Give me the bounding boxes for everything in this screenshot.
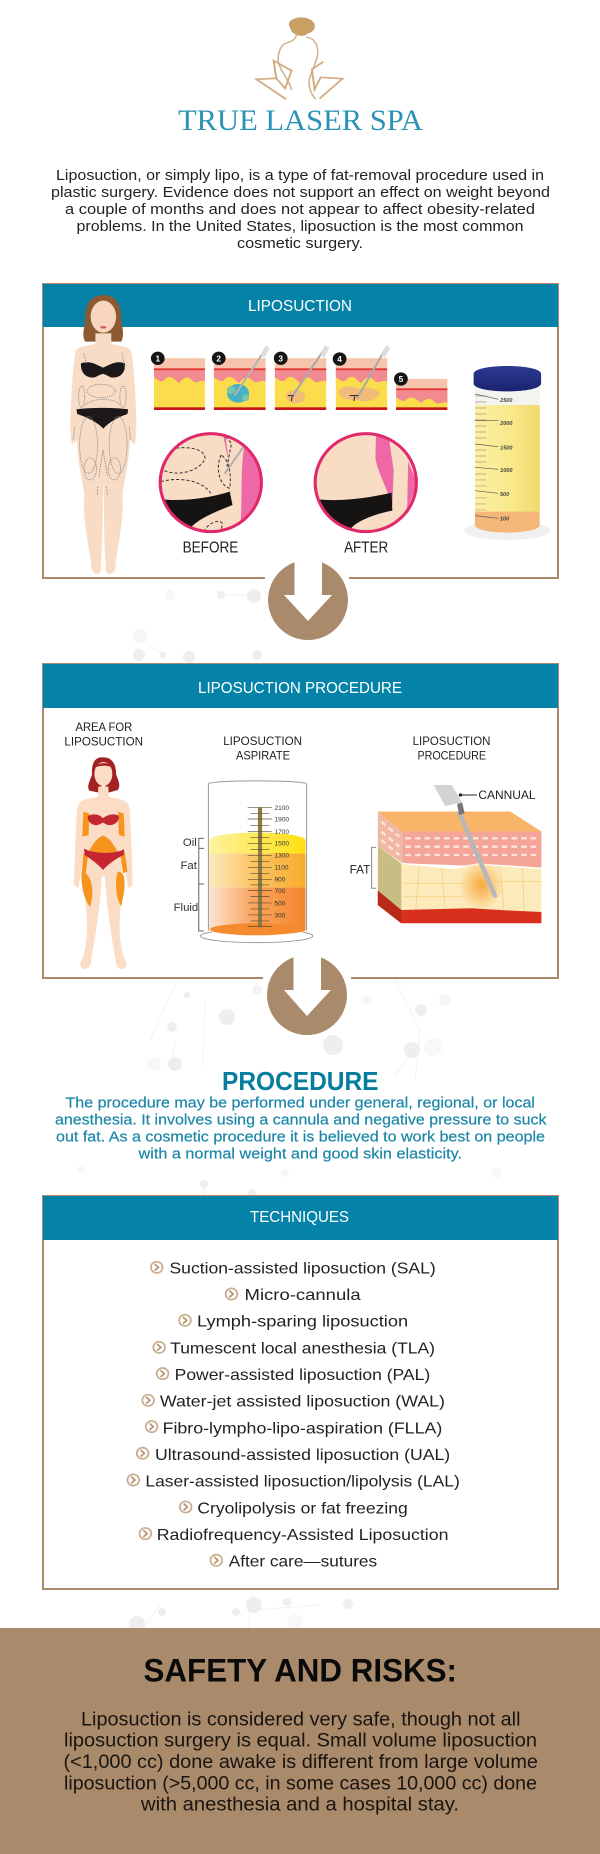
techniques list xyxy=(127,1261,460,1571)
aspirate beaker: 500 xyxy=(275,900,286,907)
intro text: cosmetic surgery. xyxy=(237,235,363,252)
procedure text: The procedure may be performed under general, regional, or local xyxy=(66,1095,535,1112)
intro text: plastic surgery. Evidence does not support an effect on weight beyond xyxy=(51,184,550,201)
logo xyxy=(178,17,423,137)
intro text xyxy=(51,167,550,252)
aspirate beaker: 1700 xyxy=(275,829,289,836)
header title: LIPOSUCTION PROCEDURE xyxy=(198,680,402,697)
icon: woman with dashed areas xyxy=(70,295,136,574)
aspirate beaker: 2100 xyxy=(275,805,289,812)
number badge: 2 xyxy=(216,354,222,363)
heading: procedure: PROCEDURE xyxy=(222,1066,378,1096)
step 3: skin block with cannula xyxy=(274,345,329,410)
collection cylinder: 1000 xyxy=(500,468,512,474)
panel illustrations xyxy=(70,295,550,574)
caption: liposuction aspirate: ASPIRATE xyxy=(236,749,290,763)
panel: safety and risks xyxy=(0,1628,600,1854)
aspirate beaker: 1100 xyxy=(275,865,289,872)
intro text: a couple of months and does not appear to affect obesity-related xyxy=(65,201,535,218)
label: after: AFTER xyxy=(344,539,388,556)
panel: liposuction procedure xyxy=(43,664,558,978)
arrow: down 1 xyxy=(265,558,349,640)
procedure text: with a normal weight and good skin elasticity. xyxy=(137,1146,462,1163)
procedure text: anesthesia. It involves using a cannula and negative pressure to suck xyxy=(55,1112,547,1129)
caption: area for liposuction xyxy=(64,720,143,749)
aspirate beaker: 1900 xyxy=(275,816,289,823)
list item 2: Micro-cannula xyxy=(245,1287,361,1304)
panel header xyxy=(43,1196,558,1240)
list item 10: Cryolipolysis or fat freezing xyxy=(197,1501,408,1517)
safety text: (<1,000 cc) done awake is different from large volume xyxy=(64,1752,538,1773)
number badge: 3 xyxy=(278,354,284,363)
panel: techniques xyxy=(43,1196,558,1589)
safety text: liposuction surgery is equal. Small volume liposuction xyxy=(64,1731,537,1752)
after circle xyxy=(315,433,417,532)
intro text: Liposuction, or simply lipo, is a type of fat-removal procedure used in xyxy=(56,167,544,184)
aspirate beaker: 700 xyxy=(275,888,286,895)
list item 5: Power-assisted liposuction (PAL) xyxy=(175,1367,430,1384)
number badge: 5 xyxy=(399,375,404,384)
logo icon: woman and lotus xyxy=(256,17,343,99)
safety text: Liposuction is considered very safe, though not all xyxy=(81,1709,520,1730)
caption: liposuction procedure xyxy=(413,734,490,763)
heading: safety and risks: SAFETY AND RISKS: xyxy=(144,1653,457,1689)
label: fat: FAT xyxy=(350,862,371,876)
collection cylinder: 1500 xyxy=(500,445,512,451)
collection cylinder xyxy=(464,366,550,540)
aspirate beaker: 900 xyxy=(275,877,286,884)
caption: liposuction procedure: LIPOSUCTION xyxy=(413,734,490,748)
header title: TECHNIQUES xyxy=(250,1209,349,1226)
list item 8: Ultrasound-assisted liposuction (UAL) xyxy=(155,1447,450,1464)
number badge: 4 xyxy=(337,355,342,364)
collection cylinder: 100 xyxy=(500,517,509,523)
label: before: BEFORE xyxy=(183,539,238,556)
step 1: skin block xyxy=(151,352,205,410)
list item 3: Lymph-sparing liposuction xyxy=(197,1314,408,1331)
collection cylinder: 2500 xyxy=(499,398,512,404)
aspirate beaker: 1300 xyxy=(275,853,289,860)
aspirate beaker: Fat xyxy=(181,860,198,872)
caption: liposuction procedure: PROCEDURE xyxy=(417,749,486,763)
background: molecule pattern xyxy=(77,589,502,1640)
before circle xyxy=(160,433,264,533)
list item 12: After care—sutures xyxy=(229,1554,377,1571)
label: cannual: CANNUAL xyxy=(478,788,536,802)
caption: area for liposuction: AREA FOR xyxy=(75,720,132,734)
safety text: liposuction (>5,000 cc, in some cases 10,000 cc) done xyxy=(64,1773,537,1794)
aspirate beaker: 1500 xyxy=(275,841,289,848)
panel header xyxy=(43,664,558,708)
panel header xyxy=(43,284,558,327)
step 2: skin block with injection xyxy=(212,345,270,410)
intro text: problems. In the United States, liposuction is the most common xyxy=(76,218,524,235)
aspirate beaker: 300 xyxy=(275,912,286,919)
header title: LIPOSUCTION xyxy=(248,298,352,315)
panel: liposuction xyxy=(43,284,558,578)
procedure text: out fat. As a cosmetic procedure it is believed to work best on people xyxy=(56,1129,545,1146)
step 5: healed skin block xyxy=(394,372,447,410)
aspirate beaker xyxy=(174,781,313,943)
procedure text xyxy=(55,1095,547,1163)
list item 11: Radiofrequency-Assisted Liposuction xyxy=(157,1527,448,1544)
collection cylinder: 2000 xyxy=(499,421,512,427)
safety text xyxy=(64,1709,538,1816)
arrow: down 2 xyxy=(263,953,351,1035)
aspirate beaker: Oil xyxy=(183,837,197,849)
caption: liposuction aspirate xyxy=(223,734,302,763)
skin layers diagram xyxy=(350,785,541,923)
list item 7: Fibro-lympho-lipo-aspiration (FLLA) xyxy=(163,1421,442,1437)
aspirate beaker: Fluid xyxy=(174,902,198,914)
caption: area for liposuction: LIPOSUCTION xyxy=(64,735,143,749)
panel illustrations xyxy=(64,720,541,969)
logo wordmark: TRUE LASER SPA xyxy=(178,104,423,137)
icon: woman with target areas xyxy=(74,757,133,969)
step 4: skin block with larger cavity xyxy=(333,345,390,410)
caption: liposuction aspirate: LIPOSUCTION xyxy=(223,734,302,748)
list item 4: Tumescent local anesthesia (TLA) xyxy=(170,1341,435,1357)
list item 6: Water-jet assisted liposuction (WAL) xyxy=(160,1394,445,1411)
safety text: with anesthesia and a hospital stay. xyxy=(140,1795,459,1816)
number badge: 1 xyxy=(155,354,161,363)
list item 1: Suction-assisted liposuction (SAL) xyxy=(169,1261,436,1277)
list item 9: Laser-assisted liposuction/lipolysis (LAL) xyxy=(145,1474,460,1491)
collection cylinder: 500 xyxy=(500,492,509,498)
